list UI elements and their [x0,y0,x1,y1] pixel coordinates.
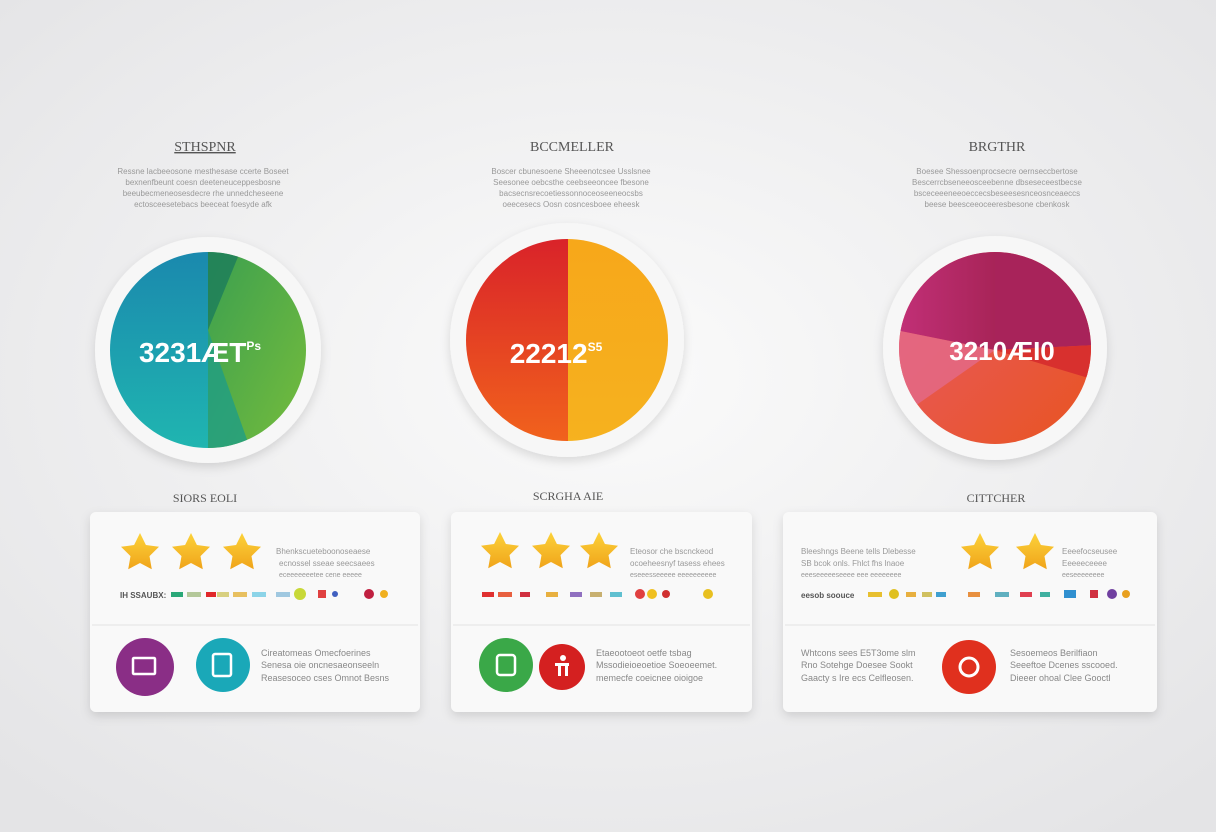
text block: rating text right: eeseeeeeeee [1062,572,1105,579]
icon: teal document [196,638,250,692]
legend: colour swatches [482,589,713,599]
text block: column 3 [912,167,1082,209]
text block: rating text right: Eeeeeceeee [1062,559,1107,568]
text block: column 2: Seesonee oebcsthe ceebseeoncee fbesone [493,178,649,187]
heading: column 3 [912,140,1082,209]
text block: card 1 [261,648,390,683]
chart: magenta/orange pie [883,236,1107,460]
text block: rating text left: Bleeshngs Beene tells Dlebesse [801,547,916,556]
text block: card 3 left: Whtcons sees E5T3ome slm [801,648,916,658]
text block: rating text: Bhenkscueteboonoseaese [276,547,371,556]
value label: 3231ÆT [139,337,246,368]
text block: card 3 left [801,648,916,683]
value label: 22212 [510,338,588,369]
text block: column 2: bacsecnsrecoetiessonnoceoseeneocsbs [499,189,643,198]
heading: column 2: BCCMELLER [530,140,615,155]
text block: column 1: ectosceesetebacs beeceat foesyde afk [134,200,273,209]
text block: rating text left: eeeseeeeeseeee eee eeeeeeee [801,572,902,579]
text block: rating text: eseeesseeeee eeeeeeeeee [630,572,717,579]
icon: stars [481,532,618,568]
panel: card 1 [90,512,420,712]
value label: 3210ÆI0 [949,336,1055,366]
text block: column 2: Boscer cbunesoene Sheeenotcsee Usslsnee [491,167,651,176]
text block: rating text [630,547,725,579]
text block: card 3 left: Gaacty s Ire ecs Celfleosen. [801,673,914,683]
heading: column 1: STHSPNR [174,140,236,155]
text block: rating text right: Eeeefocseusee [1062,547,1118,556]
icon: purple tablet [116,638,174,696]
text block: card 1: Senesa oie oncnesaeonseeln [261,660,379,670]
text block: card 1: Cireatomeas Omecfoerines [261,648,371,658]
text block: rating text: ocoeheesnyf tasess ehees [630,559,725,568]
legend: colour swatches: eesob soouce [801,591,855,600]
text block: column 2: oeecesecs Oosn cosncesboee eheesk [503,200,640,209]
text block: card 2 [596,648,717,683]
icon: stars [961,533,1054,569]
label: column 3: CITTCHER [967,491,1025,505]
icon: red person [539,644,585,690]
text block: card 3 right: Sesoemeos Berilfiaon [1010,648,1098,658]
value label: S5 [588,340,603,354]
text block: card 1: Reasesoceo cses Omnot Besns [261,673,390,683]
label: column 2: SCRGHA AIE [533,489,603,503]
text block: rating text right [1062,547,1118,579]
icon: green [479,638,533,692]
text block: column 1: beeubecmeneosesdecre rhe unnedcheseene [123,189,284,198]
text block: card 2: Etaeootoeot oetfe tsbag [596,648,692,658]
text block: column 1: Ressne lacbeeosone mesthesase ccerte Boseet [117,167,289,176]
heading: column 1 [117,140,289,209]
text block: rating text left: SB bcok onls. Fhlct fhs lnaoe [801,559,905,568]
text block: rating text: Eteosor che bscnckeod [630,547,713,556]
text block: card 3 right: Seeeftoe Dcenes sscooed. [1010,660,1118,670]
panel: card 2 [451,512,752,712]
legend: colour swatches: IH SSAUBX: [120,591,166,600]
panel: card 3 [783,512,1157,712]
legend: colour swatches [801,589,1130,600]
chart: teal/green pie [95,237,321,463]
text block: column 3: Bescerrcbseneeosceebenne dbseseceestbecse [912,178,1082,187]
text block: card 2: memecfe coeicnee oioigoe [596,673,703,683]
label: column 1: SIORS EOLI [173,491,237,505]
legend: colour swatches [120,588,388,600]
value label: Ps [246,339,261,353]
text block: rating text: ecnossel sseae seecsaees [279,559,375,568]
heading: column 2 [491,140,651,209]
text block: rating text left [801,547,916,579]
chart: red/orange pie [450,223,684,457]
text block: column 3: beese beesceeoceeresbesone cbenkosk [924,200,1070,209]
text block: card 2: Mssodieioeoetioe Soeoeemet. [596,660,717,670]
icon: stars [121,533,261,569]
heading: column 3: BRGTHR [969,140,1026,155]
text block: card 3 right: Dieeer ohoal Clee Gooctl [1010,673,1111,683]
text block: rating text [276,547,375,579]
text block: column 1: bexnenfbeunt coesn deeteneuceppesbosne [125,178,281,187]
icon: red at-sign [942,640,996,694]
text block: column 2 [491,167,651,209]
text block: column 1 [117,167,289,209]
text block: column 3: Boesee Shessoenprocsecre oernseccbertose [916,167,1078,176]
text block: column 3: bsceceeeneeoeccecsbeseesesnceosnceaeccs [914,189,1080,198]
text block: card 3 left: Rno Sotehge Doesee Sookt [801,660,913,670]
text block: card 3 right [1010,648,1118,683]
text block: rating text: eceeeeeeetee cene eeeee [279,572,362,579]
